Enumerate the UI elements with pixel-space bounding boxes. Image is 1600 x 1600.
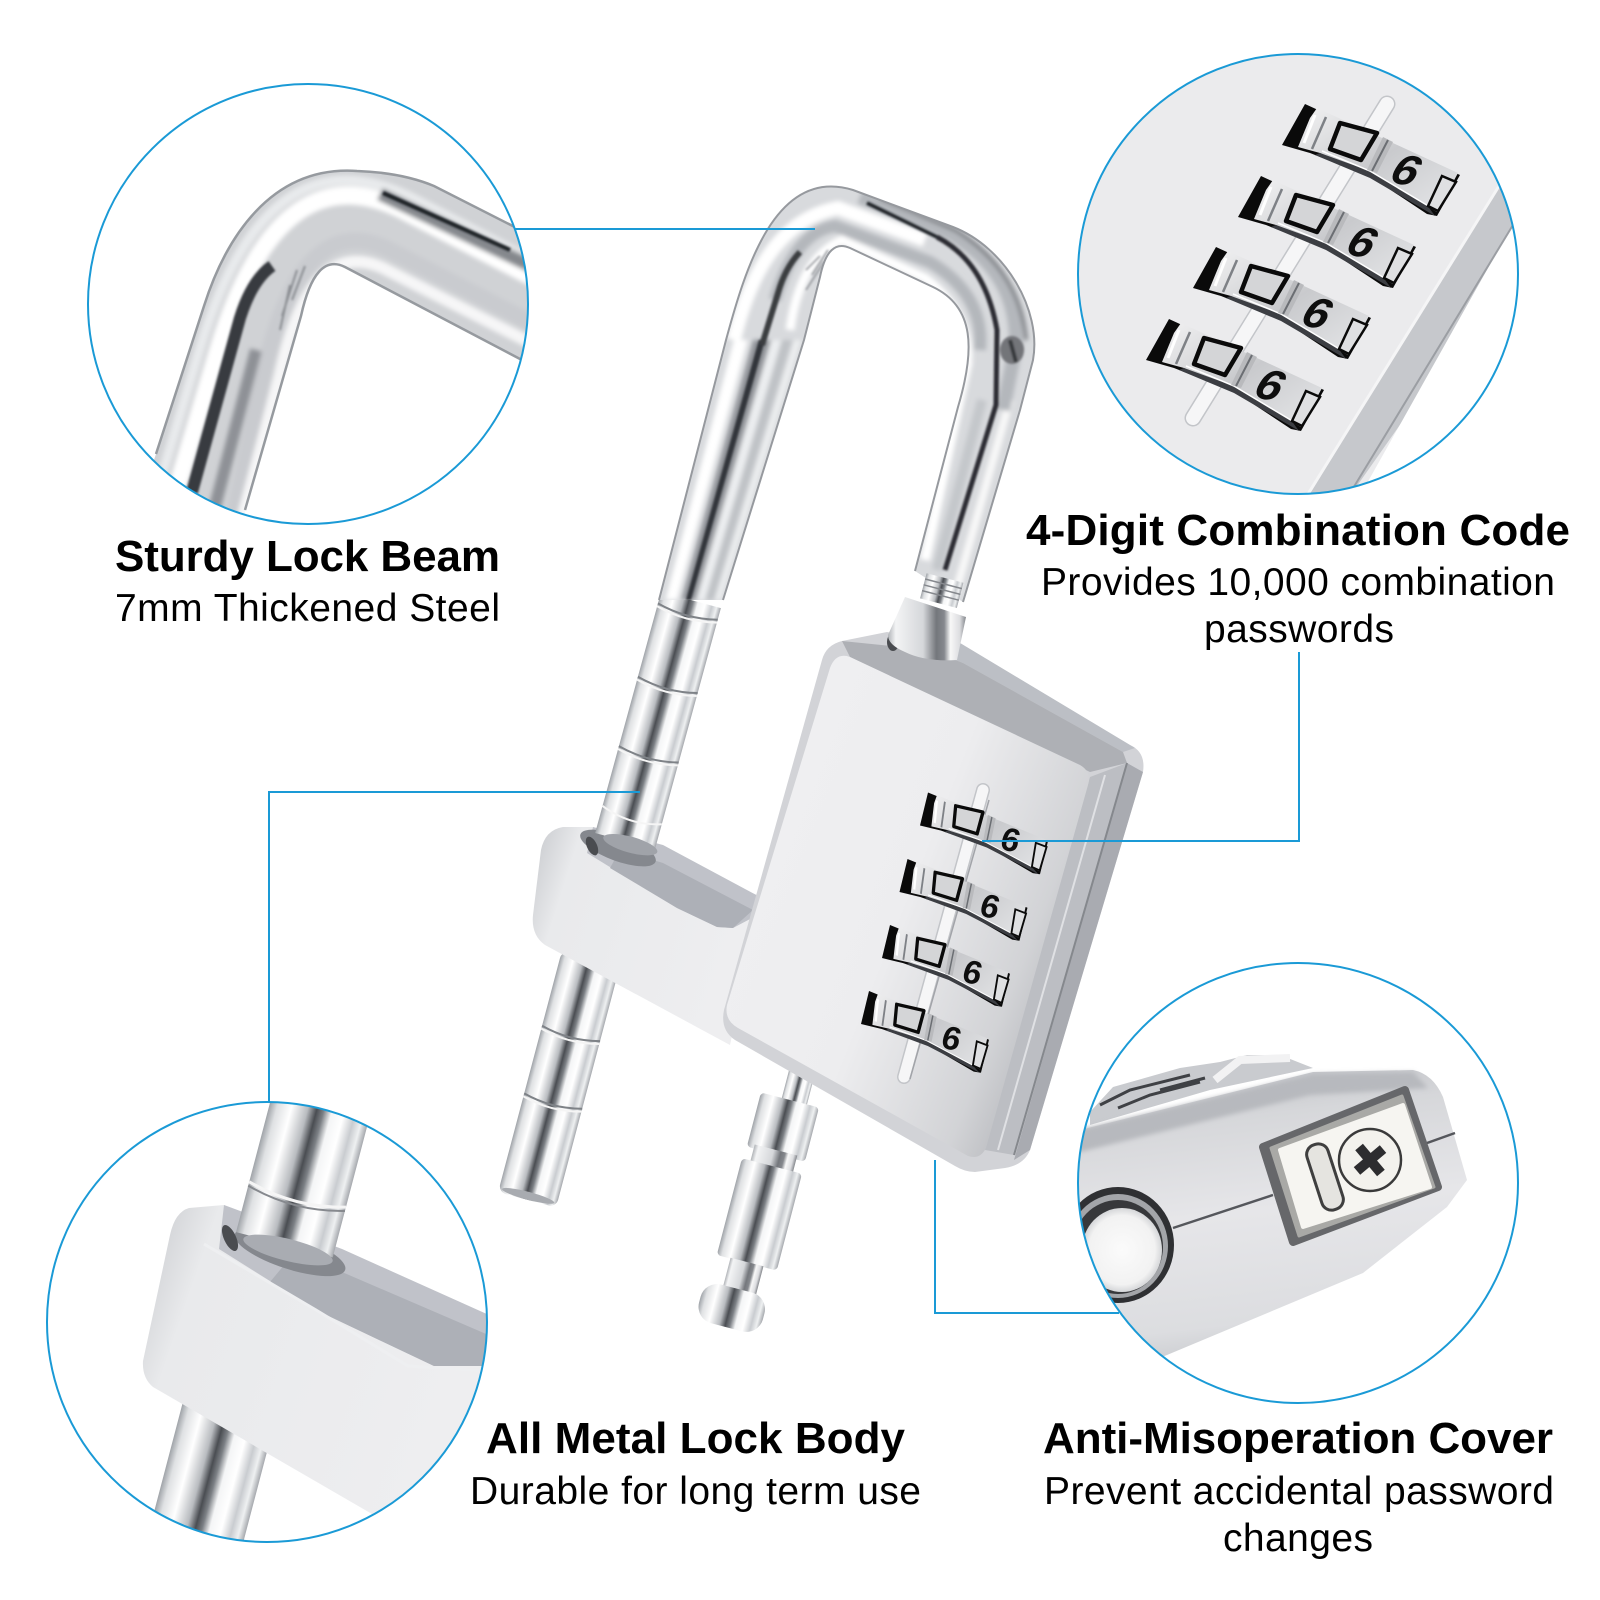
text block: 4-digit combination code	[1026, 506, 1570, 651]
text block: sturdy lock beam: Sturdy Lock Beam	[115, 532, 500, 581]
text block: 4-digit combination code: passwords	[1204, 608, 1394, 651]
text block: 4-digit combination code: Provides 10,000 combination	[1041, 561, 1555, 604]
text block: sturdy lock beam: 7mm Thickened Steel	[115, 587, 500, 630]
combination dials on body: 6	[958, 954, 986, 993]
shackle leg segment above bracket	[592, 592, 724, 860]
threaded neck	[920, 573, 963, 608]
combination dials on body: 6	[976, 888, 1004, 927]
connector line: lock body	[269, 792, 640, 1103]
button	[1080, 1187, 1174, 1303]
text block: all metal lock body	[470, 1414, 921, 1513]
enlarged dials: 6	[1292, 288, 1344, 338]
main padlock illustration	[498, 170, 1143, 1336]
collar at shackle base	[887, 597, 966, 660]
circle callout: bracket close-up	[46, 1101, 488, 1543]
connector line: lock beam	[515, 228, 815, 230]
shackle lower stub	[498, 950, 620, 1207]
pin detail below body	[695, 1069, 819, 1336]
text block: anti-misoperation cover: Prevent accidental password	[1044, 1470, 1554, 1513]
text block: all metal lock body: All Metal Lock Body	[486, 1414, 906, 1463]
side bracket	[533, 822, 762, 1045]
combination dials on body: 6	[937, 1020, 965, 1059]
enlarged dials: 6	[1337, 217, 1389, 267]
text block: anti-misoperation cover	[1043, 1414, 1554, 1560]
circle callout: lock beam close-up	[87, 83, 529, 525]
screw cover plate	[1263, 1090, 1438, 1242]
text block: anti-misoperation cover: Anti-Misoperation Cover	[1043, 1414, 1553, 1463]
text block: all metal lock body: Durable for long term use	[470, 1470, 921, 1513]
text block: 4-digit combination code: 4-Digit Combination Code	[1026, 506, 1570, 555]
text block: anti-misoperation cover: changes	[1223, 1517, 1373, 1560]
lock body	[723, 632, 1143, 1172]
shackle bend, crossbar and short leg	[658, 186, 1036, 602]
enlarged dials: 6	[1245, 360, 1297, 410]
enlarged dials: 6	[1381, 145, 1433, 195]
combination dials on body	[853, 786, 1056, 1079]
connector line: combination code	[982, 652, 1299, 841]
circle callout: anti-misoperation cover close-up	[1060, 963, 1518, 1403]
text block: sturdy lock beam	[115, 532, 500, 630]
circle callout: combination dials close-up	[1078, 54, 1540, 510]
connector line: anti-misoperation cover	[935, 1160, 1119, 1313]
combination dials on body: 6	[996, 821, 1024, 860]
enlarged dials	[1146, 104, 1460, 431]
dial edges visible above body	[1090, 1055, 1313, 1125]
